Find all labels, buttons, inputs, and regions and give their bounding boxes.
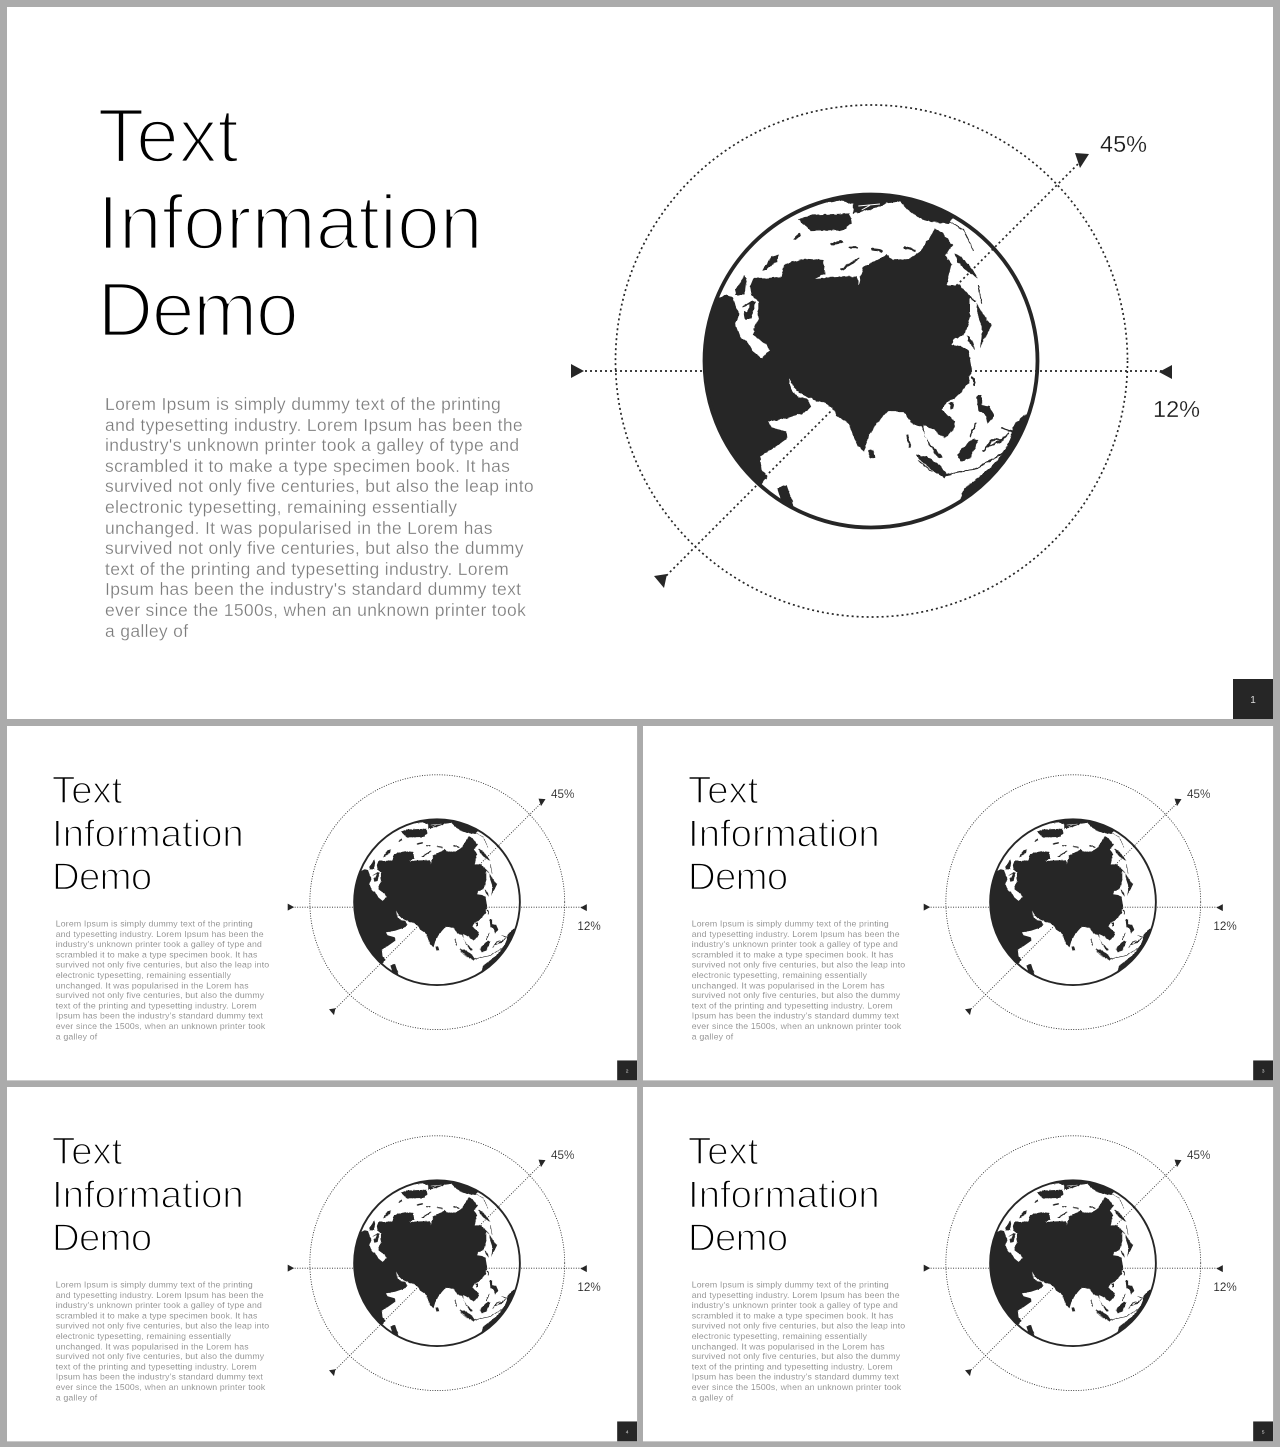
body text: a galley of xyxy=(56,1031,97,1041)
label 12%: 12% xyxy=(1213,1281,1237,1294)
body text: electronic typesetting, remaining essentially xyxy=(56,1331,231,1341)
page number xyxy=(1253,1060,1273,1080)
globe outline xyxy=(354,1180,520,1346)
dotted orbit xyxy=(946,775,1201,1030)
label 12%: 12% xyxy=(577,1281,601,1294)
body text: a galley of xyxy=(692,1031,733,1041)
page number xyxy=(1233,679,1273,719)
body text: and typesetting industry. Lorem Ipsum has been the xyxy=(56,1290,264,1300)
label 12%: 12% xyxy=(1213,920,1237,933)
label 12%: 12% xyxy=(1153,396,1200,422)
title: Demo xyxy=(688,855,787,898)
title: Text xyxy=(52,1130,122,1172)
globe base xyxy=(704,194,1038,528)
body text: Ipsum has been the industry's standard dummy text xyxy=(105,579,521,599)
page number xyxy=(617,1060,637,1080)
arrow heads xyxy=(288,799,587,1015)
page number: 2 xyxy=(626,1068,629,1074)
body text xyxy=(56,919,269,1041)
body text: unchanged. It was popularised in the Lorem has xyxy=(56,980,249,990)
body text: and typesetting industry. Lorem Ipsum has been the xyxy=(692,929,900,939)
body text: electronic typesetting, remaining essentially xyxy=(692,1331,867,1341)
dotted orbit xyxy=(616,105,1128,617)
panel: thumbnail 3 xyxy=(643,726,1273,1080)
body text: ever since the 1500s, when an unknown printer took xyxy=(692,1382,901,1392)
body text: unchanged. It was popularised in the Lorem has xyxy=(105,518,493,538)
globe base xyxy=(990,1180,1156,1346)
dotted orbit xyxy=(946,1136,1201,1391)
globe base xyxy=(354,1180,520,1346)
body text: a galley of xyxy=(692,1392,733,1402)
title xyxy=(688,1130,880,1259)
title xyxy=(52,1130,244,1259)
body text xyxy=(692,919,905,1041)
globe land xyxy=(690,187,1043,517)
body text: survived not only five centuries, but also the leap into xyxy=(692,1321,905,1331)
dotted orbit xyxy=(310,1136,565,1391)
globe diagram xyxy=(924,774,1237,1030)
title: Text xyxy=(688,769,758,811)
body text: scrambled it to make a type specimen book. It has xyxy=(56,949,257,959)
title: Information xyxy=(98,180,483,266)
body text: scrambled it to make a type specimen book. It has xyxy=(692,949,893,959)
globe base xyxy=(990,819,1156,985)
body text: unchanged. It was popularised in the Lorem has xyxy=(56,1341,249,1351)
page number: 3 xyxy=(1262,1068,1265,1074)
body text: survived not only five centuries, but also the leap into xyxy=(692,960,905,970)
body text: Ipsum has been the industry's standard dummy text xyxy=(692,1011,899,1021)
body text: Ipsum has been the industry's standard dummy text xyxy=(692,1372,899,1382)
arrow heads xyxy=(924,1160,1223,1376)
title xyxy=(688,769,880,898)
body text: industry's unknown printer took a galley of type and xyxy=(56,1300,262,1310)
page number: 1 xyxy=(1250,695,1256,706)
body text: survived not only five centuries, but also the dummy xyxy=(56,1351,264,1361)
title: Information xyxy=(688,1173,880,1216)
title: Demo xyxy=(52,1216,151,1259)
title: Demo xyxy=(52,855,151,898)
body text: Lorem Ipsum is simply dummy text of the printing xyxy=(692,1280,889,1290)
page number xyxy=(617,1421,637,1441)
body text: industry's unknown printer took a galley of type and xyxy=(692,939,898,949)
panel: main slide xyxy=(7,7,1273,719)
globe base xyxy=(354,819,520,985)
body text: Ipsum has been the industry's standard dummy text xyxy=(56,1372,263,1382)
panel: thumbnail 4 xyxy=(7,1087,637,1441)
body text: ever since the 1500s, when an unknown printer took xyxy=(56,1021,265,1031)
arrow heads xyxy=(571,153,1172,588)
title: Text xyxy=(688,1130,758,1172)
title: Information xyxy=(688,812,880,855)
body text: a galley of xyxy=(56,1392,97,1402)
panel: thumbnail 5 xyxy=(643,1087,1273,1441)
body text: Ipsum has been the industry's standard dummy text xyxy=(56,1011,263,1021)
globe land xyxy=(347,1176,523,1341)
body text: unchanged. It was popularised in the Lorem has xyxy=(692,980,885,990)
body text: and typesetting industry. Lorem Ipsum has been the xyxy=(56,929,264,939)
body text: scrambled it to make a type specimen book. It has xyxy=(56,1310,257,1320)
body text: text of the printing and typesetting industry. Lorem xyxy=(105,559,509,579)
body text: survived not only five centuries, but also the dummy xyxy=(692,1351,900,1361)
globe diagram xyxy=(924,1135,1237,1391)
label 45%: 45% xyxy=(1100,131,1147,157)
body text: Lorem Ipsum is simply dummy text of the printing xyxy=(56,919,253,929)
body text: Lorem Ipsum is simply dummy text of the printing xyxy=(692,919,889,929)
arrow heads xyxy=(924,799,1223,1015)
body text xyxy=(56,1280,269,1402)
body text: text of the printing and typesetting industry. Lorem xyxy=(56,1362,257,1372)
panel: thumbnail 2 xyxy=(7,726,637,1080)
body text: survived not only five centuries, but also the dummy xyxy=(692,990,900,1000)
body text: scrambled it to make a type specimen book. It has xyxy=(105,456,510,476)
body text: industry's unknown printer took a galley of type and xyxy=(105,435,519,455)
body text: text of the printing and typesetting industry. Lorem xyxy=(692,1001,893,1011)
body text: a galley of xyxy=(105,621,188,641)
body text: text of the printing and typesetting industry. Lorem xyxy=(692,1362,893,1372)
body text xyxy=(105,394,534,641)
dotted axes xyxy=(580,157,1165,580)
body text: industry's unknown printer took a galley of type and xyxy=(56,939,262,949)
dotted axes xyxy=(928,1162,1219,1372)
body text xyxy=(692,1280,905,1402)
body text: survived not only five centuries, but also the leap into xyxy=(56,1321,269,1331)
title xyxy=(52,769,244,898)
globe land xyxy=(983,1176,1159,1341)
label 45%: 45% xyxy=(551,1149,574,1162)
body text: electronic typesetting, remaining essentially xyxy=(105,497,457,517)
body text: survived not only five centuries, but also the leap into xyxy=(105,476,534,496)
body text: Lorem Ipsum is simply dummy text of the printing xyxy=(105,394,501,414)
page number xyxy=(1253,1421,1273,1441)
body text: Lorem Ipsum is simply dummy text of the printing xyxy=(56,1280,253,1290)
globe diagram xyxy=(571,104,1200,618)
globe outline xyxy=(990,819,1156,985)
body text: unchanged. It was popularised in the Lorem has xyxy=(692,1341,885,1351)
body text: electronic typesetting, remaining essentially xyxy=(56,970,231,980)
body text: electronic typesetting, remaining essentially xyxy=(692,970,867,980)
body text: text of the printing and typesetting industry. Lorem xyxy=(56,1001,257,1011)
dotted axes xyxy=(292,1162,583,1372)
title xyxy=(98,92,483,352)
globe outline xyxy=(704,194,1038,528)
body text: and typesetting industry. Lorem Ipsum has been the xyxy=(105,415,523,435)
dotted axes xyxy=(292,801,583,1011)
arrow heads xyxy=(288,1160,587,1376)
globe land xyxy=(347,815,523,980)
body text: survived not only five centuries, but also the leap into xyxy=(56,960,269,970)
globe land xyxy=(983,815,1159,980)
globe diagram xyxy=(288,1135,601,1391)
title: Demo xyxy=(98,266,297,352)
body text: survived not only five centuries, but also the dummy xyxy=(56,990,264,1000)
body text: industry's unknown printer took a galley of type and xyxy=(692,1300,898,1310)
dotted axes xyxy=(928,801,1219,1011)
globe outline xyxy=(990,1180,1156,1346)
dotted orbit xyxy=(310,775,565,1030)
body text: survived not only five centuries, but also the dummy xyxy=(105,538,524,558)
title: Information xyxy=(52,812,244,855)
body text: ever since the 1500s, when an unknown printer took xyxy=(56,1382,265,1392)
label 45%: 45% xyxy=(1187,788,1210,801)
body text: ever since the 1500s, when an unknown printer took xyxy=(692,1021,901,1031)
globe outline xyxy=(354,819,520,985)
label 45%: 45% xyxy=(1187,1149,1210,1162)
body text: scrambled it to make a type specimen book. It has xyxy=(692,1310,893,1320)
title: Text xyxy=(52,769,122,811)
page number: 4 xyxy=(626,1429,629,1435)
body text: ever since the 1500s, when an unknown printer took xyxy=(105,600,526,620)
title: Demo xyxy=(688,1216,787,1259)
body text: and typesetting industry. Lorem Ipsum has been the xyxy=(692,1290,900,1300)
page number: 5 xyxy=(1262,1429,1265,1435)
title: Information xyxy=(52,1173,244,1216)
label 45%: 45% xyxy=(551,788,574,801)
title: Text xyxy=(98,92,239,178)
globe diagram xyxy=(288,774,601,1030)
label 12%: 12% xyxy=(577,920,601,933)
